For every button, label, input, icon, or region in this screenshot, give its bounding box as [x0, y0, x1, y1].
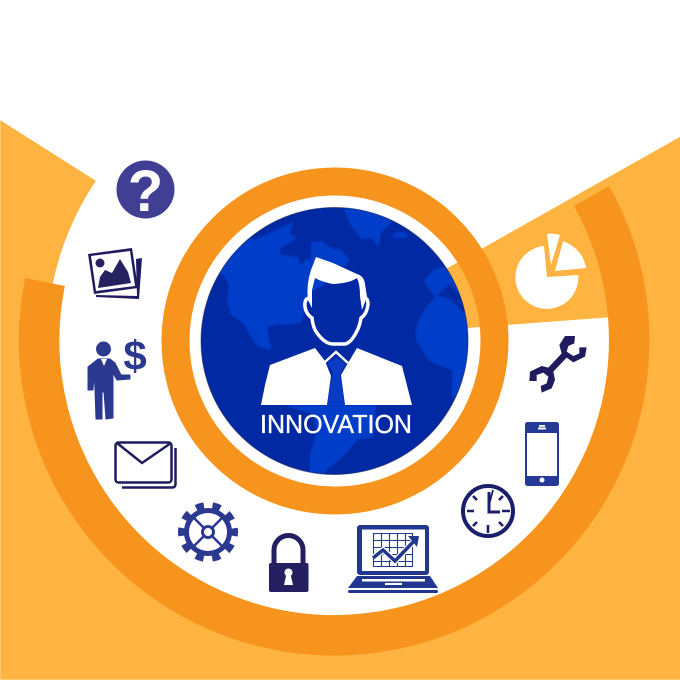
icon: padlock: [269, 536, 308, 592]
globe with innovation figure: [201, 200, 480, 480]
hair: [307, 257, 367, 310]
head outline: [305, 298, 368, 344]
collar: [325, 352, 348, 363]
icon: question mark: ?: [128, 159, 163, 224]
icon: wrench: [529, 336, 587, 393]
chart grid: [373, 533, 413, 567]
icon: laptop with chart: [348, 525, 438, 593]
figure: businessman bust: [261, 257, 412, 405]
globe rim: [201, 208, 468, 474]
outer orange arc: [39, 196, 629, 635]
globe base: [201, 208, 468, 474]
icon: smartphone: [525, 422, 559, 486]
tie: [327, 358, 345, 405]
icon: pie chart: [515, 234, 586, 309]
globe dark sea patch: [438, 284, 465, 312]
right shoulder: [341, 348, 412, 405]
icon: businessman with dollar: $: [123, 332, 147, 379]
icon: envelope: [116, 442, 176, 488]
icon: question mark: [116, 159, 174, 224]
icon: clock: [463, 486, 513, 536]
icon: photos: [88, 248, 142, 299]
chart arrow: [373, 536, 419, 561]
icon: gear: [182, 506, 234, 558]
left shoulder: [261, 348, 331, 405]
label: INNOVATION: INNOVATION: [260, 409, 412, 439]
icon: businessman with dollar: [88, 332, 147, 419]
inner orange ring: [176, 182, 494, 500]
globe continents: [220, 208, 468, 474]
